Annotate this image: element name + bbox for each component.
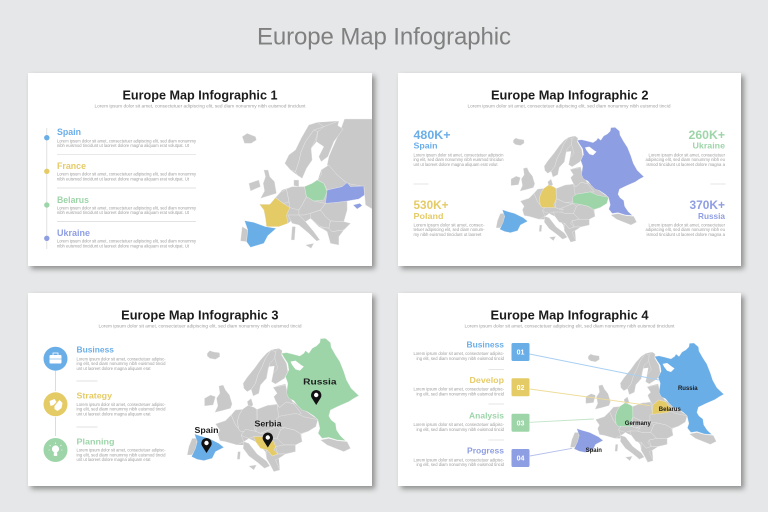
number box 03 xyxy=(511,414,529,432)
heading 3: Europe Map Infographic 3 xyxy=(121,308,278,322)
item: Strategy: Lorem ipsum dolor sit amet, consectetuer adipisc- xyxy=(76,402,166,407)
leader line: Analysis to Germany xyxy=(529,419,593,422)
panel: infographic 2 xyxy=(398,73,740,266)
item: Progress: ing elit, sed diam nonummy nibh euismod tincid xyxy=(416,462,504,467)
stat: 370K+ Russia: adipiscing elit, sed diam nonummy nibh eu xyxy=(645,227,725,232)
stat: 530K+ Poland xyxy=(413,200,485,237)
stat: 370K+ Russia xyxy=(645,200,725,237)
stat: 480K+ Spain: ing elit, sed diam nonummy nibh euismod tincidun xyxy=(413,157,504,162)
map: Europe with Spain, France, Poland, Ukraine highlighted xyxy=(240,119,372,248)
list item: Spain: Spain xyxy=(56,127,80,137)
map label: Belarus: Belarus xyxy=(658,407,681,413)
number box 02 xyxy=(511,378,529,396)
list item: Belarus: Lorem ipsum dolor sit amet, consectetuer adipiscing elit, sed diam nonummy xyxy=(56,205,196,210)
stat: 480K+ Spain xyxy=(413,130,504,184)
item: Business: Lorem ipsum dolor sit amet, consectetuer adipisc- xyxy=(413,351,504,356)
heading 2: Europe Map Infographic 2 xyxy=(490,88,648,102)
stat: 530K+ Poland: tetuer adipiscing elit, sed diam nonum- xyxy=(413,227,485,232)
stat: 530K+ Poland: 530K+ xyxy=(413,200,448,212)
subtitle 4: Lorem ipsum dolor sit amet, consectetuer adipiscing elit, sed diam nonummy nibh euismod tincidunt xyxy=(464,324,675,329)
stat: 480K+ Spain: unt ut laoreet dolore magna aliquam erat volut xyxy=(413,162,498,167)
item: Analysis: ing elit, sed diam nonummy nibh euismod tincid xyxy=(416,427,504,432)
list item: Ukraine: Lorem ipsum dolor sit amet, consectetuer adipiscing elit, sed diam nonummy xyxy=(56,239,196,244)
icon: light bulb xyxy=(43,438,67,462)
map label: Spain: Spain xyxy=(585,448,602,454)
number box 01: 01 xyxy=(516,350,524,357)
stat: 530K+ Poland: Lorem ipsum dolor sit amet, consec- xyxy=(413,222,485,227)
list item: France xyxy=(56,161,196,188)
list item: France: nibh euismod tincidunt ut laoreet dolore magna aliquam erat volutpat. Ut xyxy=(56,176,189,181)
number box 03: 03 xyxy=(516,420,524,427)
stat: 370K+ Russia: Lorem ipsum dolor sit amet, consectetuer xyxy=(648,222,725,227)
stat: 480K+ Spain: Spain xyxy=(413,141,437,151)
map label: Russia: Russia xyxy=(303,378,337,387)
heading 4: Europe Map Infographic 4 xyxy=(490,308,648,322)
map: Europe with Spain, Germany, Ukraine, Russia highlighted xyxy=(496,127,643,242)
heading 1: Europe Map Infographic 1 xyxy=(122,88,277,102)
item: Business xyxy=(76,345,166,381)
item: Planning: Planning xyxy=(76,436,114,446)
timeline xyxy=(44,128,49,249)
leader line: Progress to Spain xyxy=(529,448,572,456)
icon: puzzle pieces xyxy=(43,392,67,416)
item: Business xyxy=(413,340,504,370)
stat: 260K+ Ukraine xyxy=(645,130,725,184)
map pin: Spain xyxy=(201,438,211,453)
subtitle 1: Lorem ipsum dolor sit amet, consectetuer adipiscing elit, sed diam nonummy nibh euismod tincidunt xyxy=(94,104,306,109)
item: Develop: ing elit, sed diam nonummy nibh euismod tincid xyxy=(416,391,504,396)
subtitle 3: Lorem ipsum dolor sit amet, consectetuer adipiscing elit, sed diam nonummy nibh euismod tincid xyxy=(98,324,302,329)
stat: 370K+ Russia: Russia xyxy=(698,211,725,221)
subtitle 2: Lorem ipsum dolor sit amet, consectetuer adipiscing elit, sed diam nonummy nibh euismod tincid xyxy=(467,104,671,109)
item: Business: ing elit, sed diam nonummy nibh euismod tincid xyxy=(76,361,166,366)
list item: Spain: nibh euismod tincidunt ut laoreet dolore magna aliquam erat volutpat. Ut xyxy=(56,143,189,148)
item: Progress: Progress xyxy=(466,445,504,455)
stat: 530K+ Poland: Poland xyxy=(413,211,443,221)
panel: infographic 3 xyxy=(28,293,372,486)
leader line: Develop to Belarus xyxy=(529,389,650,406)
main title: Europe Map Infographic xyxy=(257,24,511,50)
stat: 260K+ Ukraine: ismod tincidunt ut laoreet dolore magna a xyxy=(646,162,725,167)
list item: Ukraine: nibh euismod tincidunt ut laoreet dolore magna aliquam erat volutpat. Ut xyxy=(56,243,189,248)
item: Planning: unt ut laoreet dolore magna aliquam erat xyxy=(76,457,151,462)
item: Progress: Lorem ipsum dolor sit amet, consectetuer adipisc- xyxy=(413,457,504,462)
map pin: Russia xyxy=(310,390,321,405)
number box 04 xyxy=(511,449,529,467)
panel: infographic 1 xyxy=(28,73,372,266)
item: Analysis xyxy=(413,410,504,440)
connector lines xyxy=(54,371,56,436)
stat: 480K+ Spain: 480K+ xyxy=(413,130,450,142)
leader line: Business to Russia xyxy=(529,354,658,380)
item: Develop xyxy=(413,375,504,404)
stat: 260K+ Ukraine: Ukraine xyxy=(692,141,725,151)
stat: 370K+ Russia: 370K+ xyxy=(689,200,725,212)
item: Business: unt ut laoreet dolore magna aliquam erat xyxy=(76,366,151,371)
item: Develop: Lorem ipsum dolor sit amet, consectetuer adipisc- xyxy=(413,387,504,392)
item: Strategy: unt ut laoreet dolore magna aliquam erat xyxy=(76,412,151,416)
item: Planning xyxy=(76,436,166,462)
number box 04: 04 xyxy=(516,456,524,463)
stat: 260K+ Ukraine: Lorem ipsum dolor sit amet, consectetuer xyxy=(648,152,725,157)
stat: 370K+ Russia: ismod tincidunt ut laoreet dolore magna a xyxy=(646,232,725,237)
list item: Belarus: nibh euismod tincidunt ut laoreet dolore magna aliquam erat volutpat. Ut xyxy=(56,210,189,215)
map label: Spain: Spain xyxy=(194,426,218,435)
item: Progress xyxy=(413,445,504,467)
item: Business: Business xyxy=(76,345,114,355)
panel: infographic 4 xyxy=(398,293,740,486)
map label: Serbia: Serbia xyxy=(254,419,282,428)
list item: Belarus: Belarus xyxy=(56,195,88,205)
map label: Russia: Russia xyxy=(677,386,698,392)
list item: Ukraine: Ukraine xyxy=(56,228,90,238)
item: Develop: Develop xyxy=(469,375,504,385)
stat: 530K+ Poland: my nibh euismod tincidunt ut laoreet xyxy=(413,232,482,237)
list item: Belarus xyxy=(56,195,196,222)
list item: France: France xyxy=(56,161,86,171)
map: Europe with Spain, Serbia, Russia highlighted xyxy=(187,338,358,472)
stat: 260K+ Ukraine: adipiscing elit, sed diam nonummy nibh eu xyxy=(645,157,725,162)
stat: 260K+ Ukraine: 260K+ xyxy=(688,130,725,142)
item: Strategy xyxy=(76,391,166,427)
icon: briefcase xyxy=(43,347,67,371)
map label: Germany: Germany xyxy=(624,421,651,427)
list item: France: Lorem ipsum dolor sit amet, consectetuer adipiscing elit, sed diam nonummy xyxy=(56,172,196,177)
list item: Ukraine xyxy=(56,228,196,248)
item: Business: Business xyxy=(466,340,504,350)
item: Planning: ing elit, sed diam nonummy nibh euismod tincid xyxy=(76,452,166,457)
map: Europe with Spain, Germany, Belarus, Russia highlighted xyxy=(570,343,723,462)
item: Strategy: Strategy xyxy=(76,391,112,401)
number box 01 xyxy=(511,343,529,361)
item: Planning: Lorem ipsum dolor sit amet, consectetuer adipisc- xyxy=(76,448,166,453)
number box 02: 02 xyxy=(516,385,524,392)
item: Strategy: ing elit, sed diam nonummy nibh euismod tincid xyxy=(76,407,166,412)
item: Analysis: Analysis xyxy=(468,410,504,420)
map pin: Serbia xyxy=(262,433,272,448)
list item: Spain: Lorem ipsum dolor sit amet, consectetuer adipiscing elit, sed diam nonummy xyxy=(56,138,196,143)
item: Business: Lorem ipsum dolor sit amet, consectetuer adipisc- xyxy=(76,356,166,361)
list item: Spain xyxy=(56,127,196,154)
item: Analysis: Lorem ipsum dolor sit amet, consectetuer adipisc- xyxy=(413,422,504,427)
stat: 480K+ Spain: Lorem ipsum dolor sit amet, consectetuer adipiscin xyxy=(413,152,504,157)
item: Business: ing elit, sed diam nonummy nibh euismod tincid xyxy=(416,356,504,361)
